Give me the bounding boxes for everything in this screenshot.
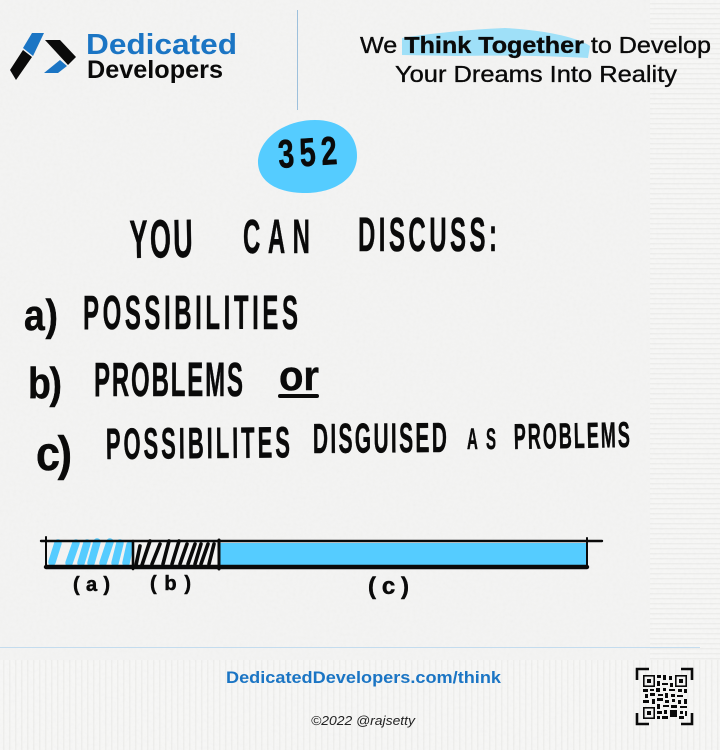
label a): a) (24, 290, 58, 340)
label (b): (b) (150, 573, 191, 595)
logo wordmark: Dedicated: Dedicated (86, 29, 237, 61)
text: PROBLEMS: PROBLEMS (94, 354, 243, 407)
heading word: YOU: YOU (129, 209, 193, 271)
data modules (643, 675, 687, 719)
segment a hatch (52, 542, 130, 563)
label (c): (c) (368, 573, 409, 600)
label b): b) (28, 358, 62, 408)
footer divider (0, 647, 700, 648)
bar outline (41, 537, 602, 569)
corner brackets (637, 669, 692, 724)
text: AS: AS (467, 424, 496, 457)
finder centres (647, 679, 683, 715)
copyright: ©2022 @rajsetty (311, 713, 417, 728)
logo wordmark: Developers: Developers (87, 56, 223, 84)
option b (28, 352, 319, 408)
tagline line 2: Your Dreams Into Reality (395, 61, 678, 87)
QR code (637, 669, 692, 724)
proportion bar (41, 537, 602, 600)
segment c fill (219, 543, 587, 566)
text: DISGUISED: DISGUISED (313, 415, 447, 463)
brush highlight (402, 28, 590, 58)
tagline line 1: We Think Together to Develop (360, 32, 711, 58)
heading word: CAN: CAN (243, 211, 310, 264)
label (a): (a) (73, 574, 110, 596)
label c): c) (36, 427, 72, 481)
blue blob (258, 120, 357, 193)
heading word: DISCUSS: DISCUSS: (358, 209, 497, 262)
option a (24, 287, 298, 340)
segment b hatch (136, 541, 214, 565)
logo mark (10, 33, 76, 80)
text: POSSIBILITES: POSSIBILITES (106, 419, 290, 469)
text: PROBLEMS: PROBLEMS (513, 415, 630, 458)
header divider (297, 10, 298, 110)
heading (129, 209, 497, 271)
number badge (258, 120, 357, 193)
footer url: DedicatedDevelopers.com/think (226, 668, 502, 687)
tagline (360, 28, 711, 87)
finder patterns (644, 676, 686, 718)
option c (36, 415, 630, 481)
text: or, underlined: or (279, 352, 319, 399)
logo (10, 29, 237, 84)
number 352: 352 (277, 128, 339, 177)
text: POSSIBILITIES: POSSIBILITIES (83, 287, 298, 340)
